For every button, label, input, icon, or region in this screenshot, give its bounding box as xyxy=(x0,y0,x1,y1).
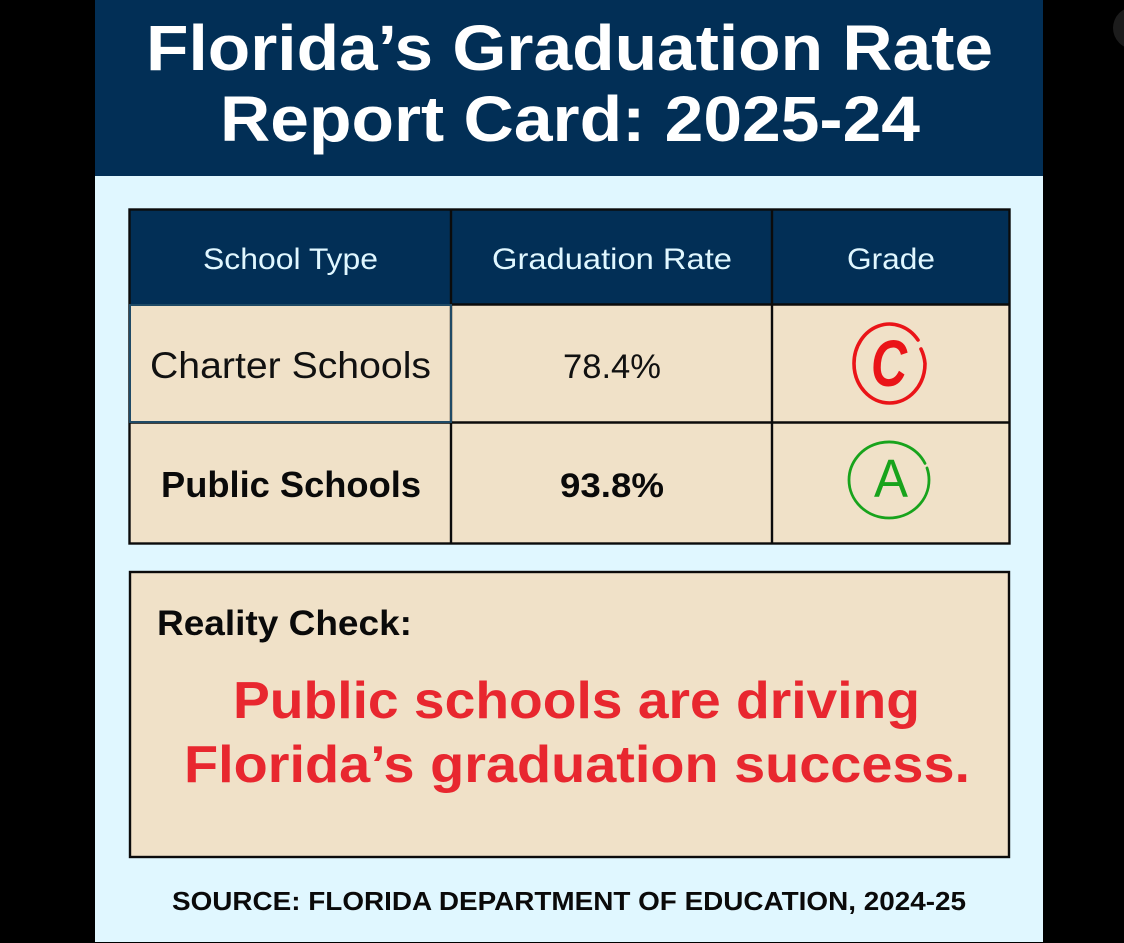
table header row: School Type xyxy=(203,243,378,276)
table header row: Grade xyxy=(847,243,935,276)
title xyxy=(146,12,993,155)
icon: red C grade: C xyxy=(871,326,908,400)
icon: green A grade: A xyxy=(874,449,908,509)
title: Report Card: 2025-24 xyxy=(220,83,920,155)
charter schools row: Charter Schools xyxy=(150,345,431,386)
charter schools row xyxy=(130,305,1010,422)
source note: SOURCE: FLORIDA DEPARTMENT OF EDUCATION, 2024-25 xyxy=(172,886,966,916)
public schools row: 93.8% xyxy=(560,467,664,505)
header band xyxy=(95,0,1043,176)
table grid lines xyxy=(129,209,1010,544)
table header row: Graduation Rate xyxy=(492,243,732,276)
key message: Public schools are driving xyxy=(233,672,920,730)
key message xyxy=(184,672,970,794)
reality check panel xyxy=(130,572,1009,857)
table xyxy=(129,209,1010,544)
overlay button fragment at top right xyxy=(1113,7,1124,49)
charter schools row: 78.4% xyxy=(563,348,661,386)
key message: Florida’s graduation success. xyxy=(184,736,970,794)
public schools row xyxy=(130,423,1010,543)
public schools row: Public Schools xyxy=(161,464,421,505)
icon: red C grade xyxy=(854,324,925,403)
reality check label: Reality Check: xyxy=(157,604,412,643)
charter cell blue outline xyxy=(130,305,451,422)
icon: green A grade xyxy=(849,442,929,518)
title: Florida’s Graduation Rate xyxy=(146,12,993,84)
table header row xyxy=(130,210,1010,304)
